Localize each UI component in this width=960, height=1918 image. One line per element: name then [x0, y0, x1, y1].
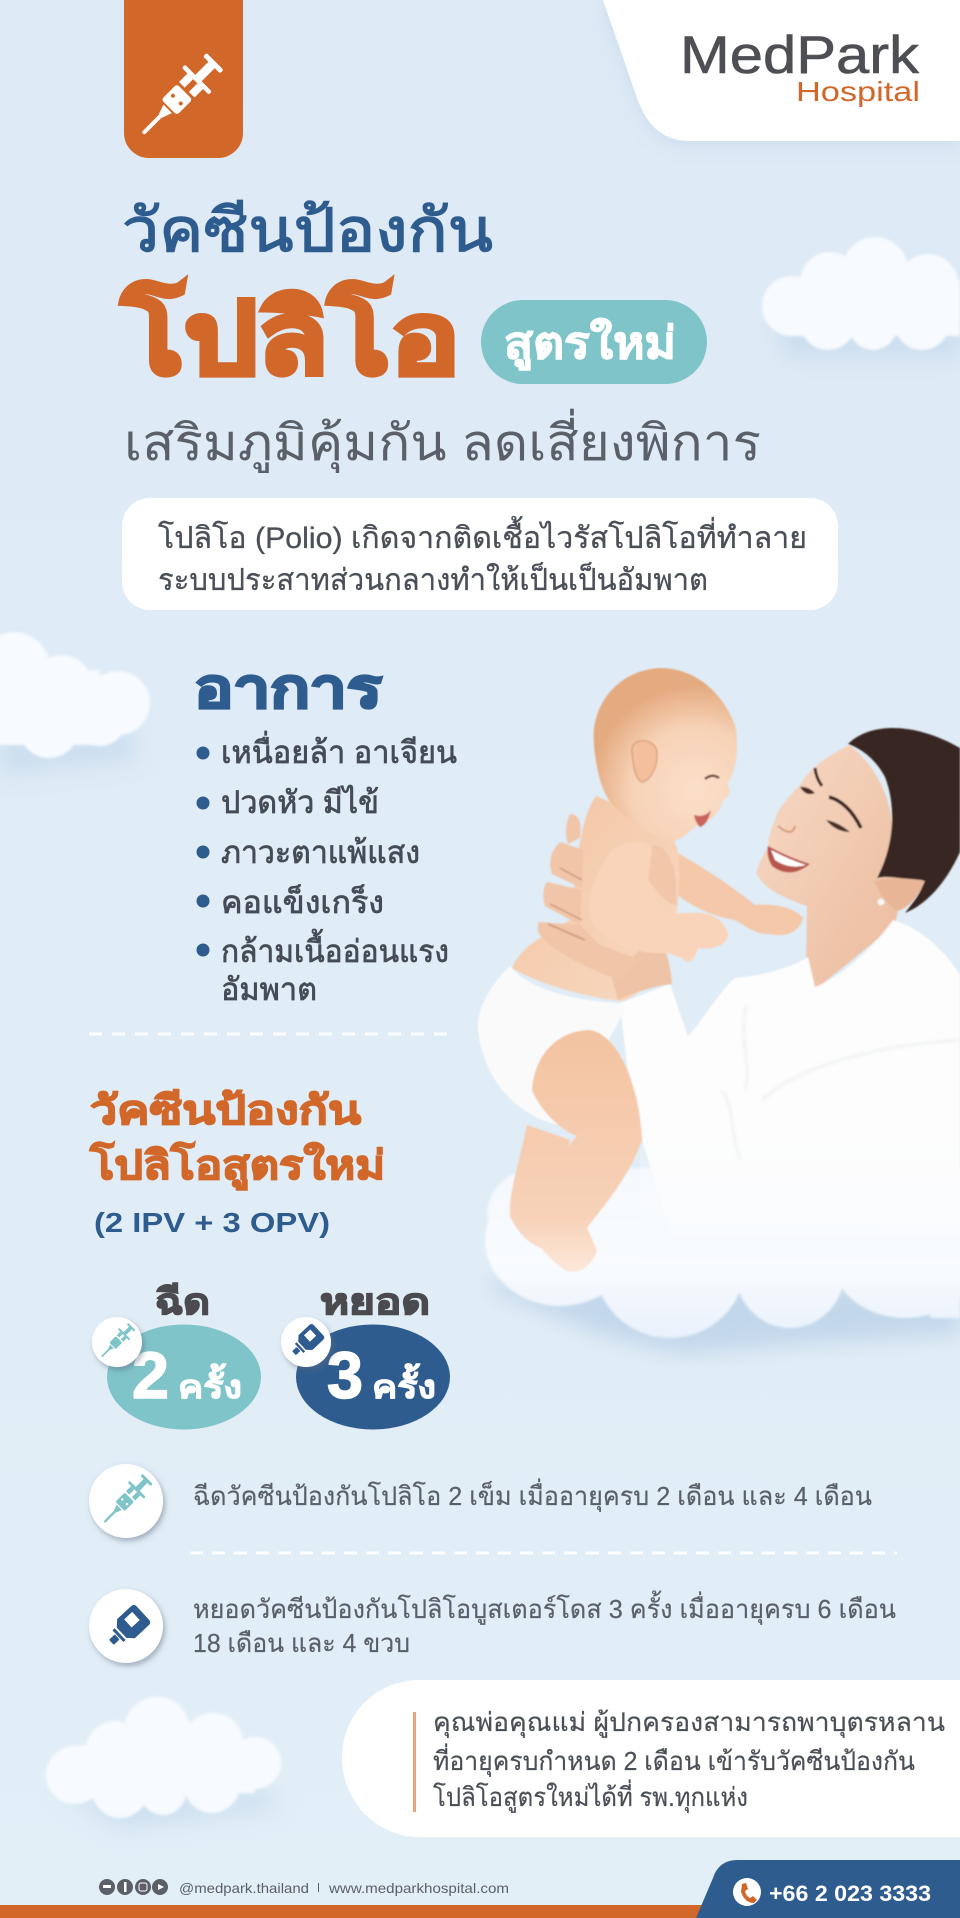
row: injection schedule: ฉีดวัคซีนป้องกันโปลิโอ 2 เข็ม เมื่ออายุครบ 2 เดือน และ 4 เดือน — [193, 1478, 872, 1512]
oral drops: 3 times — [281, 1281, 450, 1430]
icon: dropper circle — [89, 1589, 163, 1663]
row: injection schedule — [89, 1464, 872, 1538]
mother: forearm — [612, 935, 672, 1000]
pill: new formula: สูตรใหม่ — [504, 317, 676, 370]
intro box: ระบบประสาทส่วนกลางทำให้เป็นเป็นอัมพาต — [158, 561, 708, 597]
mother: thumb on baby's chest — [648, 846, 676, 905]
baby: ear, eye and mouth — [632, 741, 719, 827]
intro box: โปลิโอ (Polio) เกิดจากติดเชื้อไวรัสโปลิโอที่ทำลาย — [158, 516, 807, 555]
photo: mother — [620, 728, 960, 1240]
icon: syringe circle — [89, 1464, 163, 1538]
injection: 2 times: ฉีด — [155, 1281, 210, 1322]
heading: new polio vaccine — [89, 1089, 385, 1238]
logo: MedPark Hospital — [680, 26, 920, 107]
cloud: bottom left — [46, 1697, 281, 1830]
cloud: top right — [762, 237, 960, 358]
symptoms list: เหนื่อยล้า อาเจียน — [221, 731, 457, 770]
symptoms list: ปวดหัว มีไข้ — [221, 785, 379, 820]
callout panel — [342, 1680, 960, 1837]
icon: small dropper badge — [281, 1317, 331, 1367]
photo: baby — [478, 668, 803, 1272]
row: oral drop schedule — [89, 1589, 896, 1663]
subtitle: เสริมภูมิคุ้มกัน ลดเสี่ยงพิการ — [124, 409, 761, 473]
mother: hand on baby's back — [538, 814, 640, 980]
heading: new polio vaccine: (2 IPV + 3 OPV) — [94, 1207, 330, 1238]
orange tab with syringe icon — [124, 0, 243, 158]
phone tab: +66 2 023 3333 — [769, 1881, 931, 1906]
title line 2: polio: โปลิโอ — [121, 280, 460, 395]
baby: head — [594, 668, 737, 842]
icon: syringe — [130, 48, 228, 147]
baby: front leg — [532, 1030, 642, 1272]
oral drops: 3 times: 3 — [327, 1338, 363, 1412]
mother: ear and facial features — [768, 768, 925, 911]
pill: new formula — [481, 300, 707, 384]
cloud overlay blending sweater — [640, 1130, 960, 1260]
footer social handles — [99, 1879, 509, 1896]
intro box — [122, 498, 838, 610]
injection: 2 times: 2 — [132, 1338, 169, 1412]
callout panel: ที่อายุครบกำหนด 2 เดือน เข้ารับวัคซีนป้องกัน — [433, 1743, 915, 1777]
heading: symptoms: อาการ — [194, 659, 382, 719]
icon: small syringe badge — [92, 1317, 142, 1367]
mother: neck and face — [757, 745, 903, 990]
baby: torso — [512, 796, 680, 1001]
injection: 2 times: ครั้ง — [178, 1363, 242, 1405]
row: oral drop schedule: 18 เดือน และ 4 ขวบ — [193, 1628, 410, 1658]
callout panel: คุณพ่อคุณแม่ ผู้ปกครองสามารถพาบุตรหลาน — [433, 1707, 945, 1738]
cloud: left — [0, 632, 150, 775]
phone tab — [696, 1860, 960, 1918]
mother: hair — [848, 728, 960, 913]
icons: social — [99, 1879, 168, 1895]
symptoms list: คอแข็งเกร็ง — [221, 884, 384, 920]
symptoms list: อัมพาต — [221, 972, 317, 1007]
symptoms list — [196, 731, 457, 1007]
baby: back leg — [510, 1125, 570, 1250]
oral drops: 3 times: ครั้ง — [372, 1363, 436, 1405]
title line 1: วัคซีนป้องกัน — [122, 197, 493, 264]
footer orange bar — [0, 1905, 960, 1918]
oral drops: 3 times: หยอด — [320, 1281, 430, 1322]
logo: MedPark Hospital: MedPark — [680, 26, 920, 85]
logo: MedPark Hospital: Hospital — [796, 76, 920, 107]
footer social handles: @medpark.thailand — [179, 1880, 309, 1896]
symptoms list: กล้ามเนื้ออ่อนแรง — [221, 929, 449, 969]
baby: far arm and hand — [668, 850, 803, 935]
icon: phone — [733, 1878, 761, 1906]
baby: diaper — [478, 966, 625, 1126]
row: oral drop schedule: หยอดวัคซีนป้องกันโปลิโอบูสเตอร์โดส 3 ครั้ง เมื่ออายุครบ 6 เดือน — [193, 1590, 896, 1625]
heading: new polio vaccine: โปลิโอสูตรใหม่ — [89, 1142, 385, 1190]
callout panel: โปลิโอสูตรใหม่ได้ที่ รพ.ทุกแห่ง — [433, 1779, 748, 1813]
baby: near arm and hand — [589, 842, 728, 962]
mother: white sweater — [620, 920, 960, 1240]
heading: new polio vaccine: วัคซีนป้องกัน — [90, 1089, 361, 1133]
symptoms list: ภาวะตาแพ้แสง — [221, 835, 420, 870]
logo card — [603, 0, 960, 141]
footer social handles: www.medparkhospital.com — [328, 1880, 509, 1896]
injection: 2 times — [92, 1281, 261, 1430]
big cloud under mother and baby — [485, 1168, 960, 1355]
